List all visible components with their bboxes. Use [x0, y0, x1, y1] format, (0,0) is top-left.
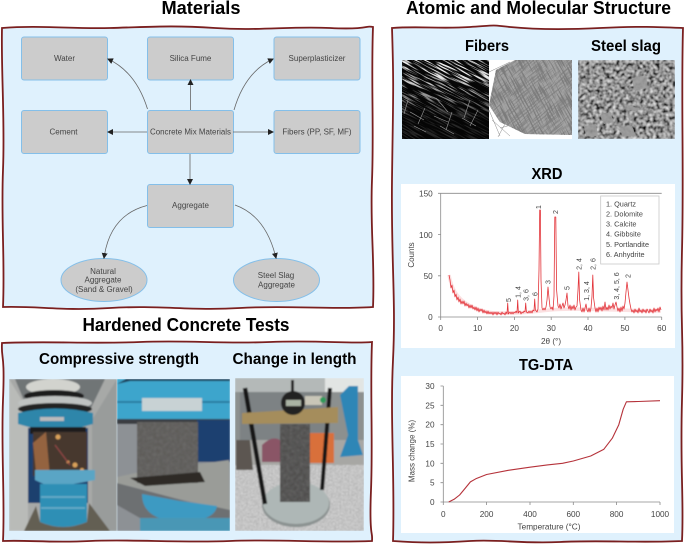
axis labels: XRD x axis: [438, 324, 667, 346]
legend: XRD phases: 6. Anhydrite: [606, 250, 645, 259]
box: Water: [22, 37, 108, 80]
peak labels: 3, 6: [524, 289, 530, 301]
panel: materials flowchart: [2, 26, 373, 309]
box: Silica Fume: Silica Fume: [170, 54, 212, 63]
axis labels: XRD y axis: [419, 190, 433, 322]
peak labels: [506, 205, 632, 302]
heading: Change in length: Change in length: [232, 351, 356, 368]
axis labels: TG x axis: 400: [523, 510, 537, 519]
axis labels: TG y axis: 15: [425, 440, 435, 449]
photo: length change measurement: [235, 378, 364, 531]
axis title: Counts: Counts: [407, 242, 416, 268]
axis labels: XRD x axis: 40: [583, 324, 593, 333]
box: Cement: [22, 110, 108, 154]
legend: XRD phases: 3. Calcite: [606, 220, 636, 229]
heading: Steel slag: Steel slag: [591, 38, 661, 55]
ellipse: Natural Aggregate: [61, 258, 147, 302]
series: XRD trace: [449, 210, 661, 315]
ellipse: Natural Aggregate: Aggregate: [85, 276, 122, 284]
axis labels: XRD x axis: 2θ (°): [541, 337, 561, 346]
peak labels: 2, 4: [576, 258, 584, 270]
panel: hardened concrete tests: [2, 341, 372, 542]
axis labels: XRD x axis: 50: [620, 324, 630, 333]
legend: XRD phases: 4. Gibbsite: [606, 230, 641, 239]
axis labels: TG y axis: 10: [425, 459, 435, 468]
peak labels: 1, 3, 4: [584, 281, 591, 301]
ellipse: Steel Slag Aggregate: Steel Slag: [258, 271, 294, 280]
axis labels: TG y axis: 20: [425, 421, 435, 430]
ellipse: Natural Aggregate: Natural: [90, 267, 116, 276]
image: steel slag micrograph: [578, 60, 675, 139]
box: Water: Water: [54, 54, 75, 63]
heading: TG-DTA: TG-DTA: [519, 357, 573, 374]
box: Cement: Cement: [49, 128, 78, 136]
peak labels: 5: [564, 286, 572, 290]
axis labels: XRD x axis: 10: [473, 324, 482, 333]
legend: XRD phases: 5. Portlandite: [606, 240, 649, 249]
image: fibers on dark background: [402, 60, 489, 139]
legend: XRD phases: [601, 196, 659, 264]
axis labels: XRD y axis: 50: [424, 272, 433, 281]
axis labels: TG y axis: 30: [425, 382, 435, 391]
axis labels: TG x axis: [441, 510, 670, 532]
axis labels: TG x axis: 600: [566, 510, 581, 519]
axis labels: XRD x axis: 60: [657, 324, 667, 333]
axis labels: XRD y axis: 100: [419, 231, 433, 240]
axis labels: TG x axis: 0: [441, 510, 446, 519]
heading: Fibers: Fibers: [465, 38, 509, 55]
chart: XRD diffractogram: [401, 184, 675, 348]
peak labels: 2, 6: [590, 258, 598, 270]
legend: XRD phases: 2. Dolomite: [606, 210, 643, 219]
axis labels: TG x axis: 800: [610, 510, 624, 519]
axis labels: TG x axis: 200: [480, 510, 494, 519]
peak labels: 2: [626, 274, 632, 278]
box: Superplasticizer: Superplasticizer: [289, 54, 346, 63]
box: Superplasticizer: [274, 37, 360, 80]
box: Concrete Mix Materials: [148, 110, 234, 154]
peak labels: 3, 4, 5, 6: [614, 272, 621, 300]
peak labels: 1: [536, 205, 543, 209]
axis labels: XRD x axis: 0: [438, 324, 443, 333]
chart: TG-DTA mass change: [401, 376, 674, 533]
series: TG curve: [449, 401, 660, 502]
peak labels: 5: [506, 298, 513, 302]
photo: compressive test close-up: [117, 379, 230, 531]
peak labels: 3: [546, 280, 552, 284]
peak labels: 2: [553, 210, 560, 214]
axis labels: XRD x axis: 20: [510, 324, 519, 333]
legend: XRD phases: 1. Quartz: [606, 200, 636, 209]
heading: Compressive strength: Compressive strength: [39, 351, 199, 368]
axis labels: TG y axis: 25: [425, 401, 435, 410]
box: Aggregate: [148, 184, 234, 228]
box: Fibers: Fibers (PP, SF, MF): [282, 128, 352, 136]
photo: compressive test whole machine: [9, 379, 117, 531]
image: loose fibers on white background: [489, 60, 572, 139]
box: Fibers: [274, 110, 360, 154]
axis labels: TG y axis: 5: [430, 479, 435, 488]
axis labels: XRD y axis: 0: [428, 313, 433, 322]
panel: atomic and molecular structure: [391, 24, 684, 544]
peak labels: 1, 4: [516, 286, 522, 298]
axis labels: XRD y axis: 150: [419, 190, 433, 198]
title: Hardened Concrete Tests: Hardened Concrete Tests: [82, 315, 290, 335]
axis title: Mass change: Mass change (%): [408, 420, 416, 482]
box: Concrete Mix Materials: Concrete Mix Materials: [150, 128, 231, 136]
axis labels: TG y axis: [425, 382, 435, 507]
ellipse: Steel Slag Aggregate: Aggregate: [258, 280, 296, 290]
axis labels: XRD x axis: 30: [547, 324, 556, 333]
axis labels: TG x axis: Temperature (°C): [518, 522, 581, 532]
box: Silica Fume: [148, 37, 234, 80]
axis labels: TG y axis: 0: [430, 498, 435, 507]
box: Aggregate: Aggregate: [172, 201, 210, 210]
peak labels: 6: [532, 292, 540, 296]
heading: XRD: XRD: [532, 166, 562, 183]
ellipse: Natural Aggregate: (Sand & Gravel): [75, 285, 133, 294]
axis labels: TG x axis: 1000: [651, 510, 670, 519]
ellipse: Steel Slag Aggregate: [234, 258, 320, 302]
arrows: flowchart connectors: [104, 59, 276, 258]
